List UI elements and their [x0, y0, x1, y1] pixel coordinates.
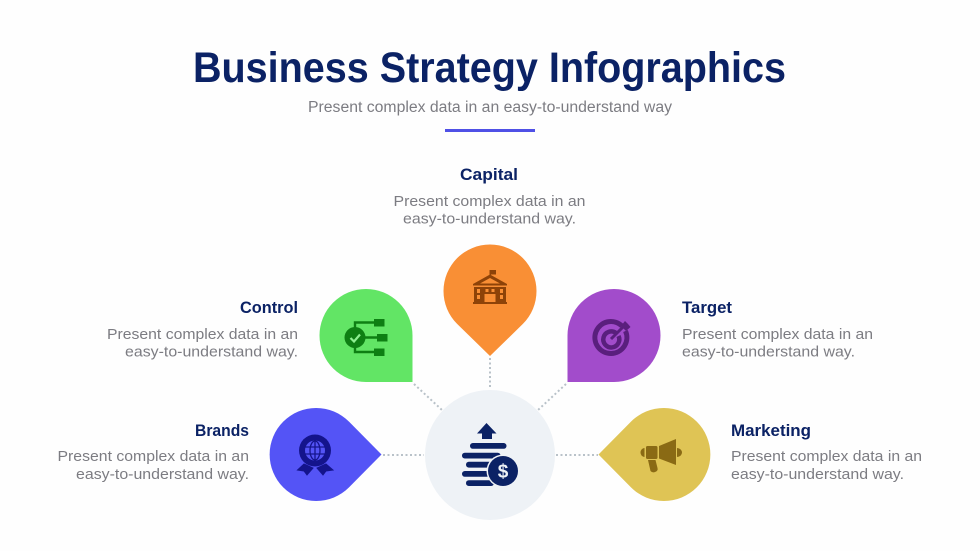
title: Business Strategy Infographics [193, 45, 786, 92]
brands text: Present complex data in an [58, 448, 249, 465]
target heading: Target [682, 299, 733, 317]
brands heading: Brands [195, 422, 249, 440]
target pin [568, 289, 660, 382]
brands pin [270, 408, 382, 501]
panel: control [107, 289, 412, 382]
marketing heading: Marketing [731, 422, 811, 440]
icon: target with arrow [595, 321, 630, 354]
panel: brands [58, 408, 382, 501]
target text: easy-to-understand way. [682, 344, 855, 360]
capital text: easy-to-understand way. [403, 210, 576, 228]
subtitle: Present complex data in an easy-to-understand way [308, 99, 672, 116]
icon: globe badge [298, 434, 333, 475]
control text: easy-to-understand way. [125, 344, 298, 360]
icon: coin stack with up arrow: $ [498, 462, 509, 482]
capital pin [444, 245, 536, 356]
target text: Present complex data in an [682, 326, 873, 343]
panel: capital [394, 166, 586, 356]
control text: Present complex data in an [107, 326, 298, 343]
brands text: easy-to-understand way. [76, 466, 249, 483]
marketing pin [598, 408, 710, 501]
title underline [445, 129, 535, 132]
central circle [425, 390, 555, 520]
control pin [320, 289, 412, 382]
icon: megaphone [640, 439, 682, 472]
control heading: Control [240, 299, 298, 317]
icon: control flowchart [344, 319, 388, 356]
panel: marketing [598, 408, 922, 501]
capital heading: Capital [460, 166, 518, 184]
icon: capital building [473, 270, 507, 304]
capital text: Present complex data in an [394, 193, 586, 210]
panel: target [568, 289, 873, 382]
marketing text: easy-to-understand way. [731, 466, 904, 483]
marketing text: Present complex data in an [731, 448, 922, 465]
